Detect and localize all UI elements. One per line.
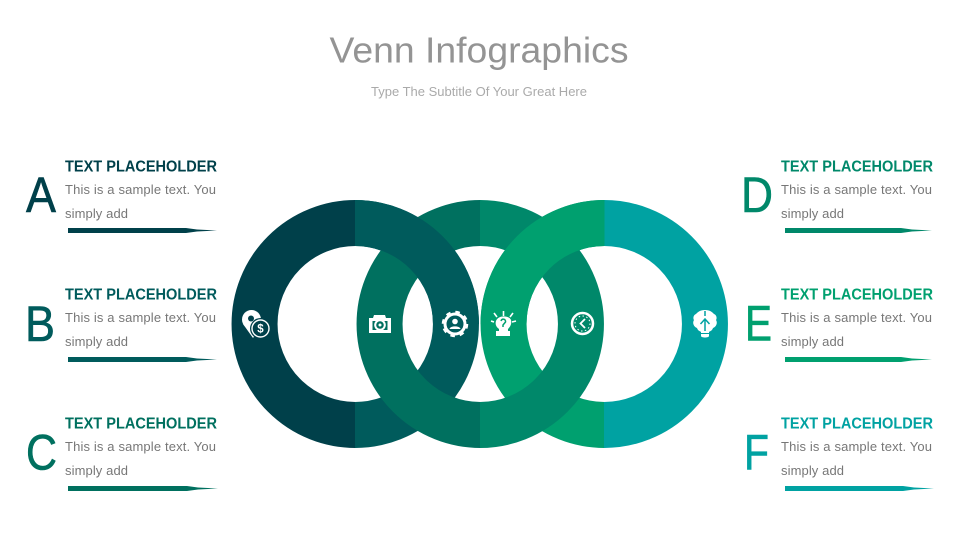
wedge bar A: [68, 228, 217, 233]
letter D: D: [741, 167, 773, 223]
panel: item D: [741, 158, 933, 233]
panel: item E: [745, 286, 933, 362]
letter B: B: [25, 296, 55, 352]
letter C: C: [26, 424, 57, 480]
letter F: F: [744, 424, 769, 480]
panel: item F: [744, 416, 934, 491]
ring 2: [380, 223, 581, 425]
icon: location pin with dollar: [242, 310, 271, 339]
ring 3 top overlap: [504, 223, 604, 324]
body text C: This is a sample text. You: [65, 439, 216, 454]
icon: brain light bulb: [693, 310, 717, 338]
icon: location pin with dollar: $: [257, 324, 264, 336]
panel: item A: [26, 158, 217, 233]
icon: camera: [369, 315, 391, 333]
heading D: TEXT PLACEHOLDER: [781, 158, 933, 176]
body text E: simply add: [781, 334, 844, 349]
icon: clock: [572, 313, 593, 334]
wedge bar C: [68, 486, 218, 491]
title: Venn Infographics: [330, 30, 628, 70]
wedge bar D: [785, 228, 932, 233]
body text A: simply add: [65, 206, 128, 221]
subtitle: Type The Subtitle Of Your Great Here: [371, 84, 587, 99]
ring 1 top overlap: [355, 223, 456, 324]
heading C: TEXT PLACEHOLDER: [65, 416, 217, 432]
wedge bar F: [785, 486, 934, 491]
letter A: A: [26, 167, 57, 223]
body text F: simply add: [781, 463, 844, 478]
body text E: This is a sample text. You: [781, 310, 932, 325]
ring 3: [504, 223, 705, 425]
body text B: This is a sample text. You: [65, 310, 216, 325]
wedge bar B: [68, 357, 217, 362]
heading F: TEXT PLACEHOLDER: [781, 416, 933, 432]
panel: item C: [26, 416, 218, 491]
chart: interlocking venn rings: [255, 223, 705, 425]
body text D: simply add: [781, 206, 844, 221]
wedge bar E: [785, 357, 932, 362]
heading A: TEXT PLACEHOLDER: [65, 158, 217, 176]
heading B: TEXT PLACEHOLDER: [65, 286, 217, 304]
letter E: E: [745, 296, 772, 352]
body text A: This is a sample text. You: [65, 182, 216, 197]
heading E: TEXT PLACEHOLDER: [781, 286, 933, 304]
panel: item B: [25, 286, 217, 362]
body text F: This is a sample text. You: [781, 439, 932, 454]
body text D: This is a sample text. You: [781, 182, 932, 197]
icon: gear with person: [443, 312, 467, 336]
body text B: simply add: [65, 334, 128, 349]
ring 1: [255, 223, 456, 425]
icon: head with idea: [491, 311, 516, 336]
body text C: simply add: [65, 463, 128, 478]
